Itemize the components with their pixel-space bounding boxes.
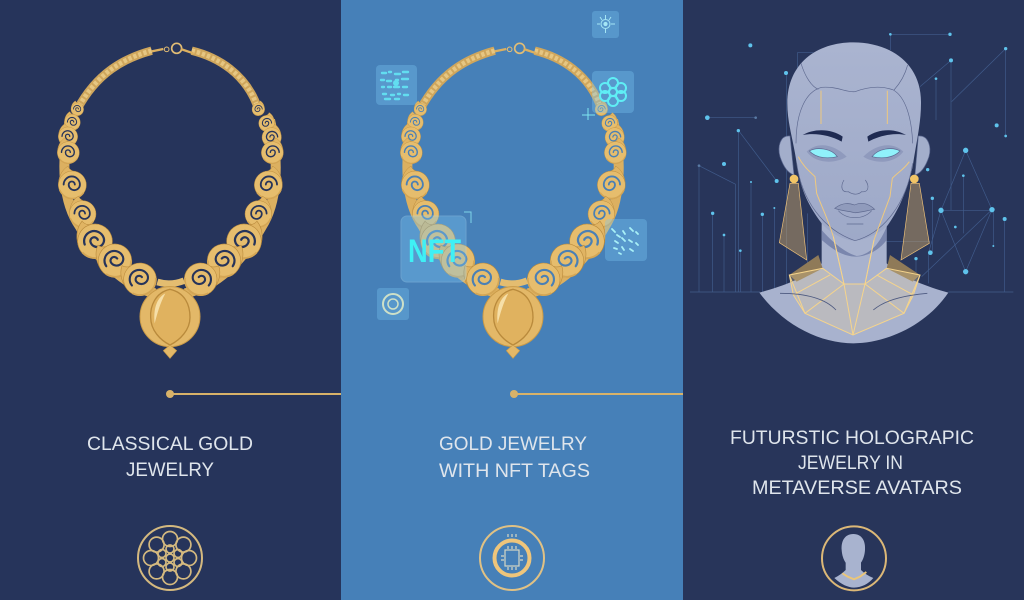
icon: gold lattice rosette [138, 526, 202, 590]
label: futuristic holographic jewelry [730, 428, 974, 499]
eyes [809, 149, 900, 158]
NFT tag: large NFT: NFT [408, 233, 461, 269]
avatar head with holographic jewelry [759, 42, 948, 343]
panel: futuristic holographic jewelry in metaverse avatars [683, 0, 1024, 600]
ears [779, 136, 930, 175]
label: futuristic holographic jewelry: METAVERSE AVATARS [752, 478, 962, 499]
label: futuristic holographic jewelry: FUTURSTIC HOLOGRAPIC [730, 428, 974, 449]
lips [835, 203, 875, 213]
label: classical gold jewelry: JEWELRY [126, 460, 214, 481]
necklace: gold with NFT tags [400, 43, 626, 358]
eyebrows [803, 130, 906, 142]
necklace: classical gold [57, 43, 283, 358]
gold face circuit lines [798, 91, 909, 284]
label: classical gold jewelry [87, 434, 253, 481]
bust and neck [759, 220, 948, 343]
face contour lines [796, 63, 913, 241]
NFT tag: data dots upper left [376, 65, 417, 105]
label: futuristic holographic jewelry: JEWELRY IN [798, 453, 903, 474]
geometric collar [789, 237, 920, 335]
NFT tag: ring lower left [377, 288, 409, 320]
icon: avatar with necklace [822, 526, 886, 590]
label: classical gold jewelry: CLASSICAL GOLD [87, 434, 253, 455]
icon: chip in ring [480, 526, 544, 590]
eye shadows [807, 145, 903, 162]
NFT tag: flower upper right [592, 71, 634, 113]
connector line left [166, 390, 341, 398]
sparkle [582, 108, 595, 120]
label: gold jewelry with NFT tags: WITH NFT TAGS [439, 461, 590, 482]
NFT tag: data dots lower right [605, 219, 647, 261]
connector line center to right [510, 390, 859, 398]
label: gold jewelry with NFT tags: GOLD JEWELRY [439, 434, 587, 455]
NFT tag: large NFT [401, 212, 471, 282]
holographic data network background [690, 33, 1013, 292]
label: gold jewelry with NFT tags [439, 434, 590, 482]
panel: gold jewelry with NFT tags [341, 0, 859, 600]
panel: classical gold jewelry [0, 0, 341, 600]
NFT tag: small circuit top [592, 11, 619, 38]
nose [842, 180, 868, 194]
head [787, 42, 921, 241]
earrings [779, 183, 929, 260]
